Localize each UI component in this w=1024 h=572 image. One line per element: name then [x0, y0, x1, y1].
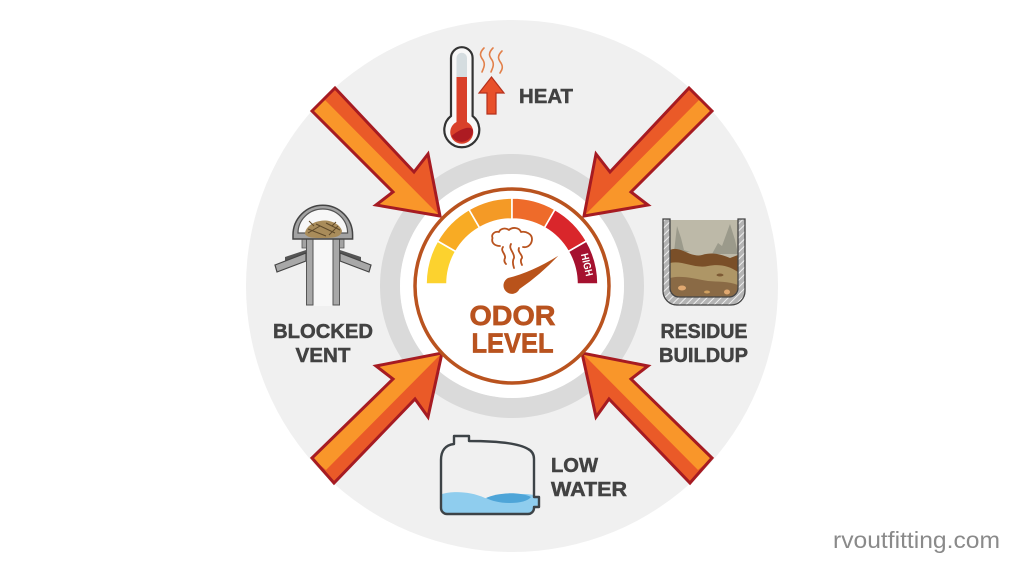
background circle: [246, 20, 778, 552]
gauge title: LEVEL: [472, 328, 554, 358]
arrow: bottom-right: [582, 353, 712, 483]
white gauge surround: [400, 174, 624, 398]
icon: residue container: [663, 219, 745, 305]
factor: residue buildup: [659, 219, 748, 367]
gauge title: [470, 300, 556, 358]
gauge title: ODOR: [470, 300, 556, 331]
factor: heat: [444, 47, 573, 147]
icon: heat waves: [480, 48, 502, 73]
icon: vent: [275, 205, 371, 306]
label: residue buildup: RESIDUE: [660, 320, 748, 343]
icon: water tank: [441, 436, 539, 514]
label: residue buildup: BUILDUP: [659, 344, 748, 367]
label: blocked vent: [273, 320, 373, 367]
icon: odor cloud: [492, 228, 532, 268]
watermark: rvoutfitting.com: [833, 527, 1000, 553]
factor: blocked vent: [273, 205, 373, 367]
label: blocked vent: VENT: [296, 344, 351, 367]
needle: [503, 256, 558, 294]
arrow: top-left: [312, 88, 440, 216]
gauge segments: [426, 198, 598, 284]
icon: nest: [305, 220, 342, 238]
label: low water: WATER: [551, 478, 627, 501]
high label: HIGH: [578, 252, 595, 277]
grey ring around gauge: [390, 164, 634, 408]
gauge: odor level: [415, 189, 609, 383]
icon: up arrow: [479, 77, 504, 114]
label: residue buildup: [659, 320, 748, 367]
arrow: top-right: [584, 88, 712, 216]
label: heat: HEAT: [519, 85, 573, 108]
arrow: bottom-left: [312, 353, 442, 483]
label: low water: LOW: [551, 454, 599, 477]
factor: low water: [441, 436, 627, 514]
gauge face: [415, 189, 609, 383]
icon: thermometer: [444, 47, 479, 147]
label: blocked vent: BLOCKED: [273, 320, 373, 343]
label: low water: [551, 454, 627, 501]
